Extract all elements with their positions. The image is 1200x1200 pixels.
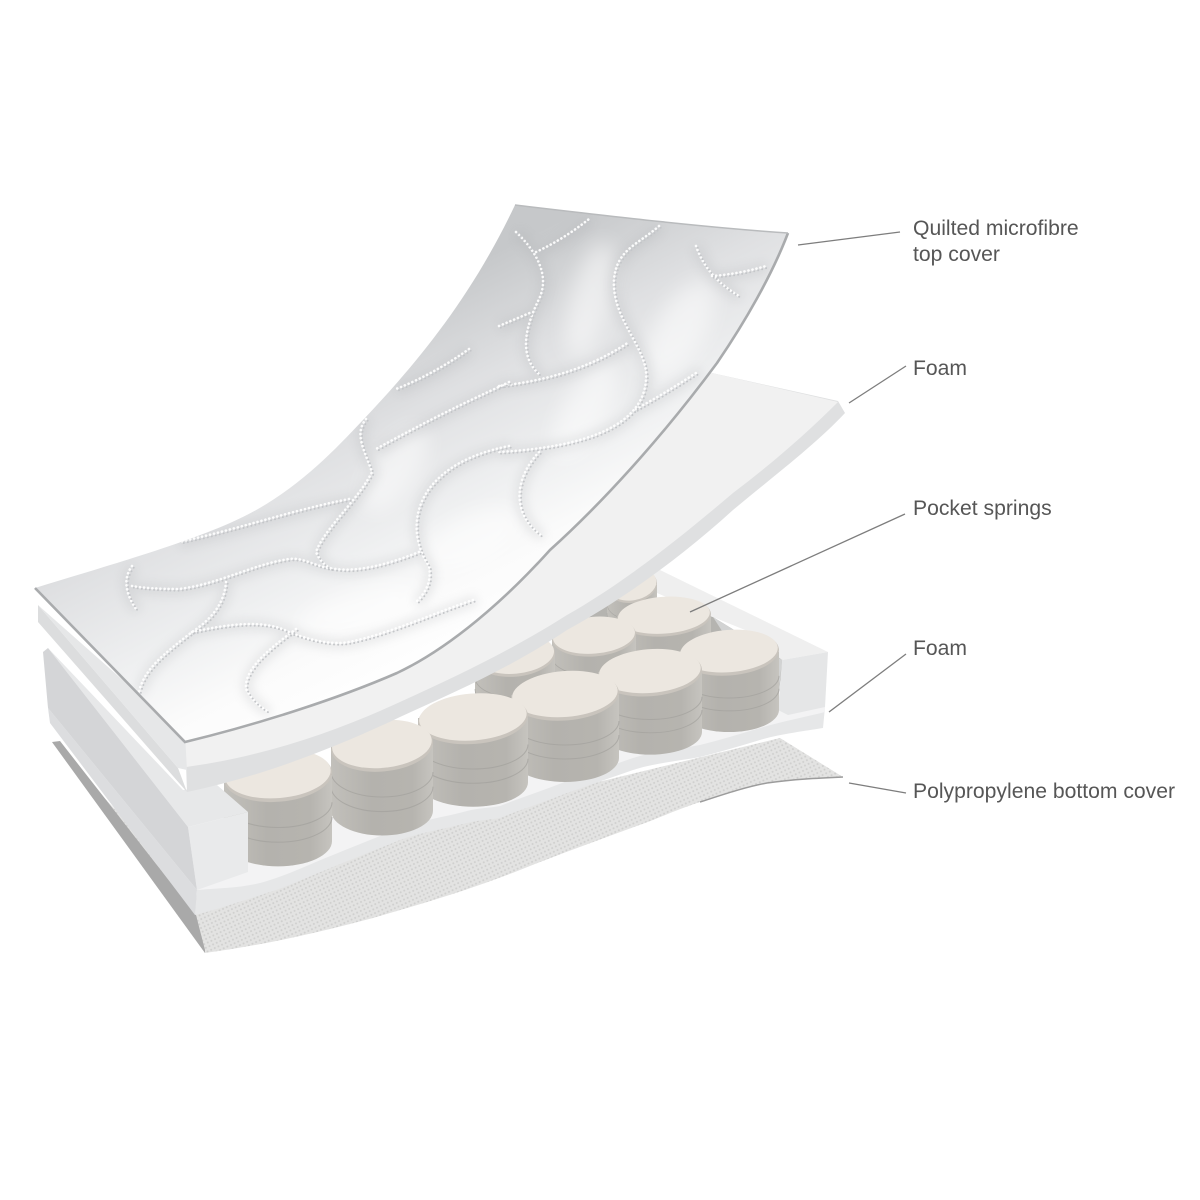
label: top cover: Quilted microfibre	[913, 217, 1079, 240]
leader line: foam upper	[849, 366, 906, 403]
spring back row	[550, 613, 638, 706]
left block top	[48, 648, 248, 827]
cover edge	[35, 233, 788, 742]
right foam block	[650, 566, 828, 715]
right block front	[778, 652, 828, 715]
label: top cover: top cover	[913, 243, 1000, 266]
quilt puffs	[370, 244, 710, 500]
lower foam base	[48, 680, 825, 915]
leader line: foam lower	[829, 654, 906, 712]
foam base front shade	[195, 680, 825, 915]
upper foam bevel	[38, 605, 187, 770]
label: bottom cover: Polypropylene bottom cover	[913, 780, 1175, 803]
left block front	[188, 812, 248, 890]
right block inner wall	[713, 617, 782, 700]
spring front row	[596, 645, 704, 755]
upper foam front strip	[185, 373, 845, 792]
upper foam side	[38, 605, 187, 792]
spring front row	[222, 745, 334, 866]
leader line: pocket springs	[690, 514, 905, 612]
left block side	[43, 648, 197, 890]
label: pocket springs: Pocket springs	[913, 497, 1052, 520]
upper foam layer	[38, 373, 845, 792]
spring front row	[416, 689, 530, 807]
spring back row	[474, 631, 557, 729]
mattress illustration	[35, 205, 845, 953]
interior shadow	[500, 590, 783, 710]
label: foam lower: Foam	[913, 637, 967, 660]
leader line: bottom cover	[849, 783, 906, 793]
spring front row	[677, 626, 781, 732]
quilt shading	[127, 220, 767, 713]
left foam block	[43, 648, 248, 890]
label: foam upper: Foam	[913, 357, 967, 380]
right block top	[650, 566, 828, 660]
spring back	[606, 565, 658, 646]
quilted top cover	[35, 205, 788, 742]
bottom cover layer	[52, 738, 843, 953]
cover surface	[35, 205, 788, 742]
upper foam top	[178, 373, 838, 768]
spring front row	[329, 716, 435, 835]
foam base side face	[48, 708, 197, 915]
pocket springs	[222, 565, 781, 866]
cover top-right edge	[515, 205, 788, 233]
leader line: top cover	[798, 232, 900, 245]
quilt stitching	[126, 219, 768, 714]
foam base top	[197, 680, 825, 890]
spring front row	[509, 667, 621, 782]
spring back row	[615, 593, 713, 686]
